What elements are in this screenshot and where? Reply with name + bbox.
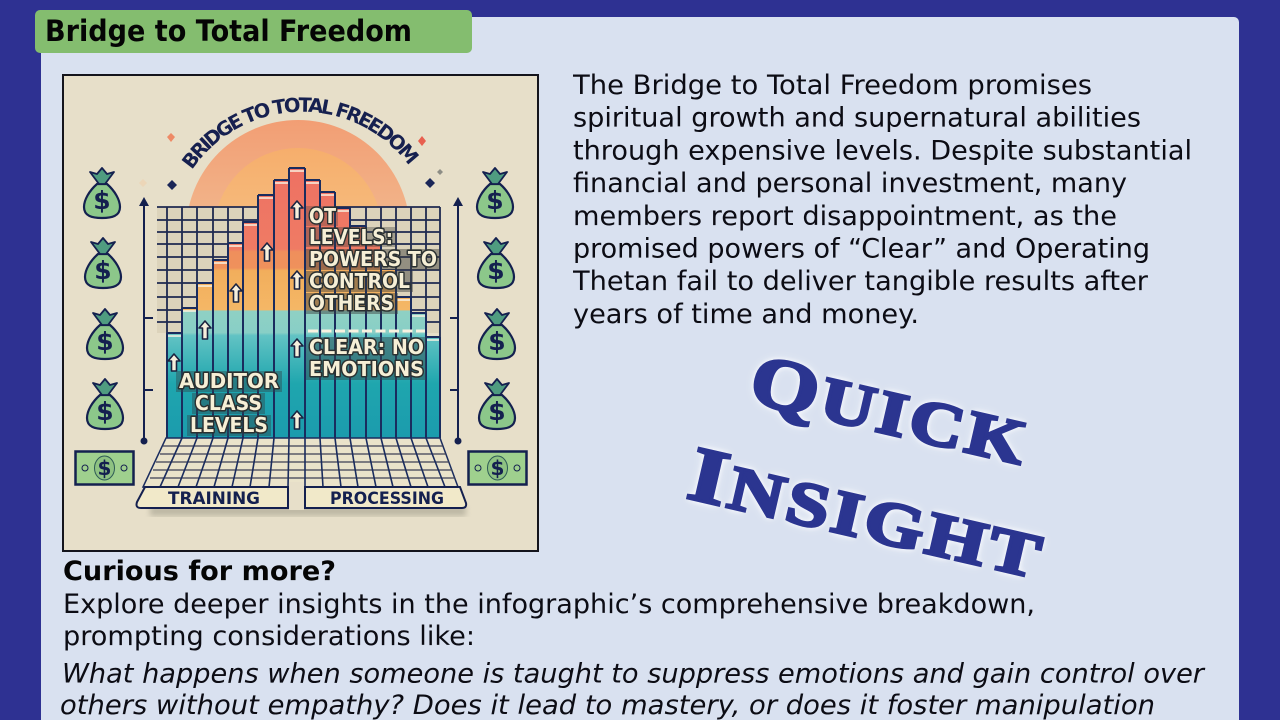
body paragraph: members report disappointment, as the: [573, 201, 1117, 232]
left axis arrow: [139, 197, 153, 444]
label: OT levels: LEVELS:: [309, 225, 393, 249]
icon: dollar bill left: [76, 452, 134, 484]
body paragraph: [573, 70, 1192, 330]
grid background: [157, 207, 440, 340]
icon: money bag: [478, 238, 514, 288]
label: OT levels: POWERS TO: [309, 247, 437, 271]
training plate: TRAINING: [168, 489, 260, 509]
body paragraph: promised powers of “Clear” and Operating: [573, 234, 1150, 264]
label: clear no emotions: CLEAR: NO: [309, 335, 424, 359]
icon: money bag: $: [488, 397, 506, 426]
deck grid floor: [143, 438, 466, 516]
sun: [189, 120, 407, 206]
body paragraph: spiritual growth and supernatural abilities: [573, 103, 1141, 134]
label: OT levels: CONTROL: [309, 269, 410, 293]
label: OT levels: OT: [309, 204, 336, 228]
sparkles: [139, 133, 443, 190]
italic question: [60, 658, 1206, 720]
icon: money bag: $: [94, 256, 112, 285]
right axis arrow: [450, 197, 463, 444]
dashed divider: [308, 330, 425, 332]
label: auditor class levels: CLASS: [195, 391, 262, 415]
body paragraph: The Bridge to Total Freedom promises: [573, 70, 1092, 101]
body paragraph: through expensive levels. Despite substantial: [573, 135, 1192, 166]
label: auditor class levels: LEVELS: [190, 413, 268, 437]
icon: money bag: [85, 238, 121, 288]
body paragraph: financial and personal investment, many: [573, 168, 1127, 199]
label: clear no emotions: EMOTIONS: [309, 357, 424, 381]
icon: dollar bill right: [468, 452, 526, 484]
curved title: BRIDGE TO TOTAL FREEDOM: [182, 97, 420, 169]
icon: dollar bill right: $: [491, 456, 504, 480]
heading banner: [35, 10, 472, 53]
icon: money bag: [479, 379, 515, 429]
icon: money bag: [84, 168, 120, 218]
label: auditor class levels: AUDITOR: [179, 369, 279, 393]
curious heading: Curious for more?: [63, 556, 336, 587]
stamp: Quick: QUICK: [743, 339, 1036, 479]
icon: money bag: $: [488, 327, 506, 356]
body paragraph: years of time and money.: [573, 299, 919, 330]
icon: money bag: $: [96, 327, 114, 356]
icon: money bag: [477, 168, 513, 218]
bar chart: levels: [167, 168, 440, 438]
italic question: What happens when someone is taught to suppress emotions and gain control over: [62, 658, 1206, 690]
arrows on bars: [168, 201, 303, 429]
icon: money bag: $: [487, 256, 505, 285]
icon: money bag: [479, 309, 515, 359]
image background: [63, 75, 538, 551]
heading text: Bridge to Total Freedom: [45, 14, 412, 48]
icon: money bag: $: [93, 186, 111, 215]
processing plate: [305, 487, 466, 509]
processing plate: PROCESSING: [330, 489, 444, 509]
icon: money bag: [87, 309, 123, 359]
label: clear no emotions: [306, 335, 426, 381]
body paragraph: Thetan fail to deliver tangible results after: [573, 266, 1149, 297]
training plate: [136, 487, 288, 509]
illustration: bridge to total freedom: [62, 74, 539, 552]
label: OT levels: OTHERS: [309, 291, 394, 315]
explore text: [63, 589, 1035, 652]
icon: money bag: [87, 379, 123, 429]
explore text: Explore deeper insights in the infographic’s comprehensive breakdown,: [63, 589, 1035, 620]
icon: money bag: $: [486, 186, 504, 215]
icon: dollar bill left: $: [98, 456, 111, 480]
stamp: Insight: INSIGHT: [681, 429, 1051, 593]
icon: money bag: $: [96, 397, 114, 426]
explore text: prompting considerations like:: [63, 621, 475, 652]
label: auditor class levels: [176, 369, 282, 437]
label: OT levels: [306, 204, 440, 315]
